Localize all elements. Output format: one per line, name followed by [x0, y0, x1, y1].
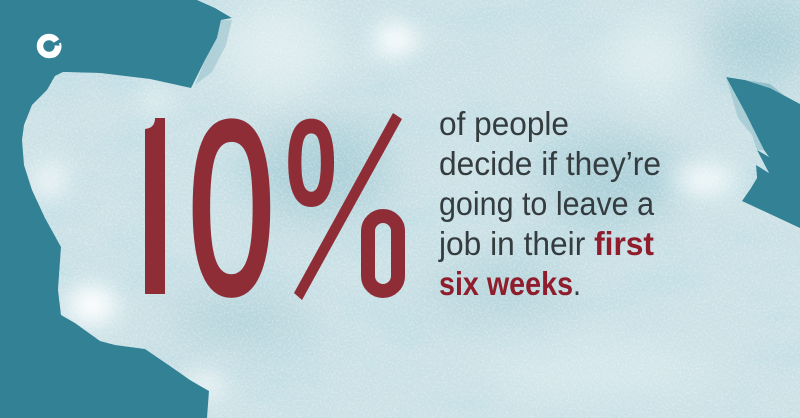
- brush edge: top-left notch: [195, 20, 232, 85]
- percent slash: [294, 113, 402, 300]
- statement text: [438, 105, 661, 302]
- icon: logo: [40, 37, 63, 57]
- digit 0: 0: [188, 72, 274, 345]
- line 2: decide if they’re: [439, 145, 661, 182]
- line 5: six weeks.: [439, 265, 581, 302]
- big number: 10%: [145, 113, 405, 300]
- line 4: job in their first: [438, 225, 654, 262]
- line 1: of people: [439, 105, 569, 142]
- percent sign: %: [285, 81, 407, 295]
- brush edge: right notch top: [746, 80, 784, 96]
- brush edge: right notch: [726, 77, 764, 150]
- line 3: going to leave a: [439, 185, 655, 222]
- percent lower ring: [368, 216, 398, 291]
- digit 1: 1: [86, 63, 206, 349]
